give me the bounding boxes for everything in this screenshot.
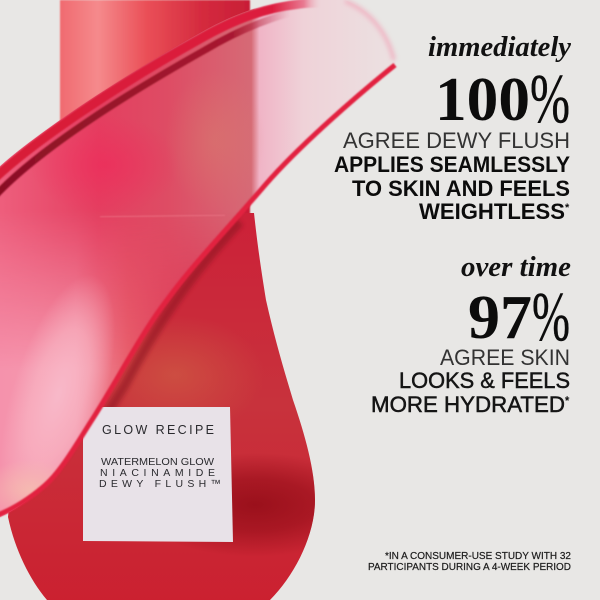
footnote: PARTICIPANTS DURING A 4-WEEK PERIOD [368, 562, 571, 573]
shadow under swoosh [100, 222, 240, 425]
brand name: GLOW RECIPE [102, 423, 214, 437]
medium text lines: MORE HYDRATED [371, 392, 565, 417]
footnote [368, 551, 571, 573]
bottle body [8, 213, 315, 600]
translucent swoosh [0, 0, 400, 530]
swoosh film [0, 0, 400, 530]
bottle [8, 0, 315, 600]
light text line: AGREE DEWY FLUSH [343, 128, 570, 153]
number: 100%: 100 [435, 66, 530, 134]
dark edge under top rim [0, 13, 290, 196]
product name: NIACINAMIDE [100, 467, 215, 479]
footnote: *IN A CONSUMER-USE STUDY WITH 32 [385, 551, 571, 562]
medium text lines: * [565, 395, 570, 407]
label sheet [83, 407, 233, 542]
bold text lines: WEIGHTLESS [419, 199, 565, 224]
bold text lines: TO SKIN AND FEELS [352, 176, 570, 201]
top rim [0, 3, 320, 178]
stat block: immediately [334, 31, 571, 224]
number: 100% [435, 61, 570, 138]
number: 97%: 97 [468, 284, 532, 352]
bold text lines: * [565, 202, 570, 214]
light text line: AGREE SKIN [440, 345, 570, 370]
product name: WATERMELON GLOW [101, 456, 214, 468]
bold text lines: APPLIES SEAMLESSLY [334, 152, 570, 177]
right edge glow [345, 1, 394, 60]
number: 100%: % [530, 61, 570, 138]
heading: over time: over time [461, 251, 571, 283]
number: 97%: % [532, 279, 570, 356]
bold text lines [334, 152, 570, 224]
medium text lines: LOOKS & FEELS [399, 368, 570, 393]
product name: DEWY FLUSH™ [99, 478, 221, 490]
heading: immediately: immediately [428, 31, 571, 63]
stat block: over time [371, 251, 571, 417]
product label [83, 407, 233, 542]
number: 97% [468, 279, 570, 356]
lower rim [0, 65, 395, 515]
bottle neck [60, 0, 250, 215]
medium text lines [371, 368, 570, 417]
product name [99, 456, 221, 490]
